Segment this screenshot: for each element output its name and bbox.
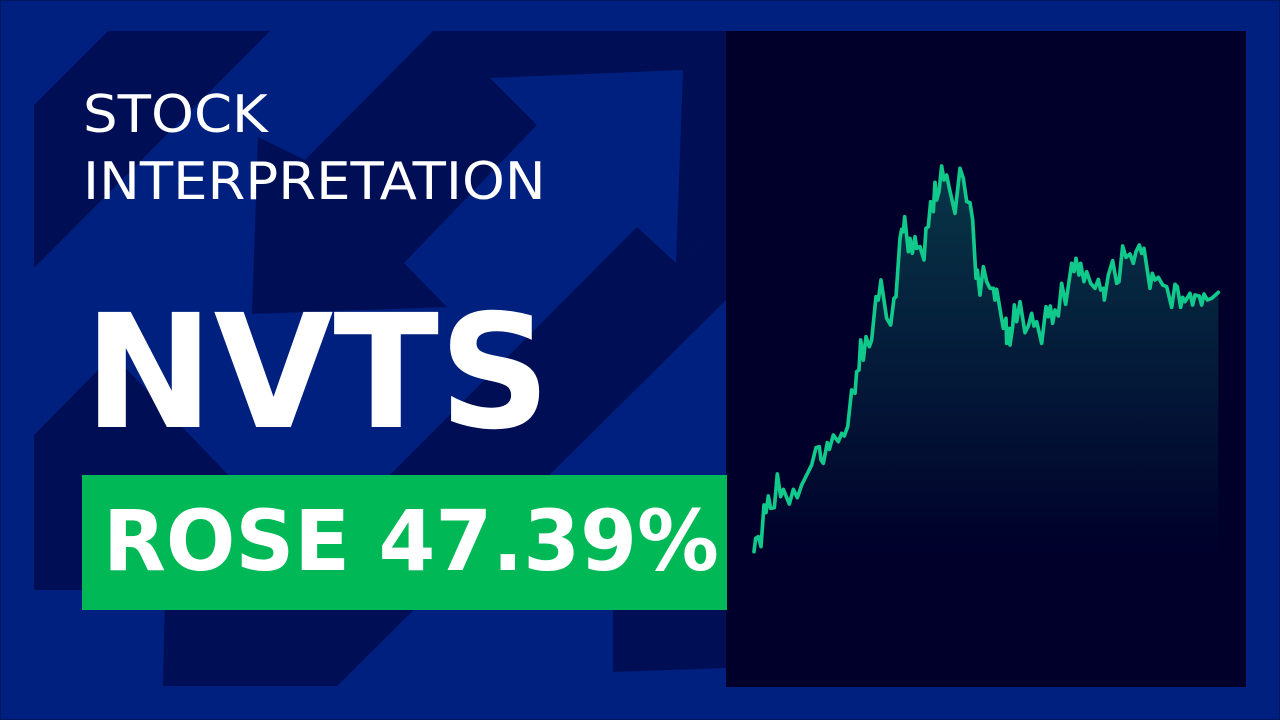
badge: change: ROSE 47.39% <box>103 492 719 590</box>
panel: chart background <box>726 31 1246 687</box>
ticker: NVTS <box>84 281 550 464</box>
title <box>83 84 546 212</box>
title: STOCK <box>83 84 270 145</box>
line chart <box>754 166 1218 557</box>
price line <box>754 166 1218 552</box>
badge: change <box>82 475 727 610</box>
chart area fill <box>754 166 1218 557</box>
background arrows <box>34 31 726 686</box>
title: INTERPRETATION <box>83 151 546 212</box>
